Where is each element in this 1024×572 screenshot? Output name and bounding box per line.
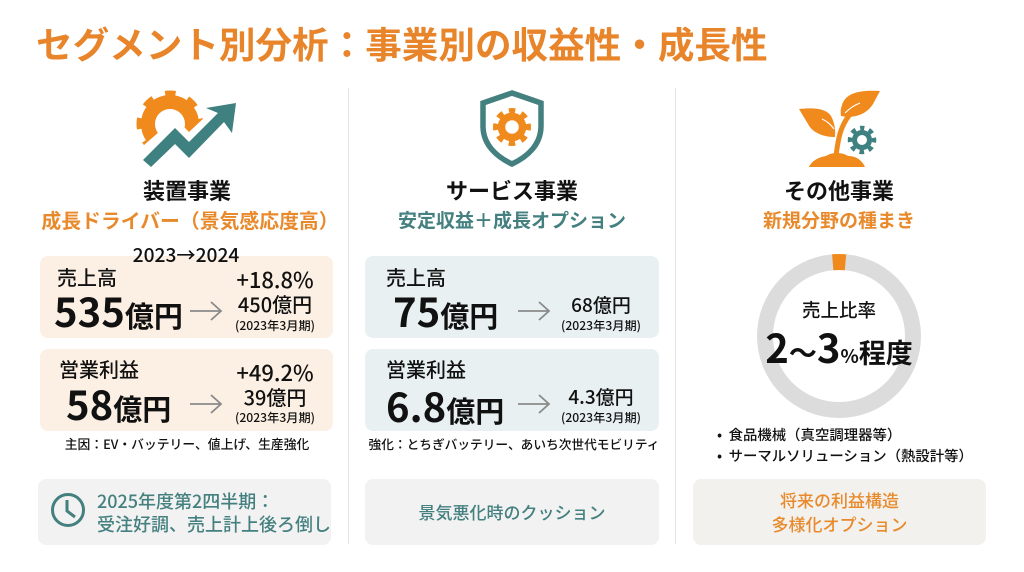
arrow <box>190 302 222 320</box>
callout: cushion <box>365 479 659 545</box>
callout text: 受注好調、売上計上後ろ倒し <box>97 511 331 537</box>
heading: その他事業: その他事業 <box>784 174 894 206</box>
title: セグメント別分析：事業別の収益性・成長性 <box>36 16 768 69</box>
prior value: 4.3億円: 4.3億円 <box>568 383 634 410</box>
callout text: 多様化オプション <box>772 511 908 536</box>
panel: 装置事業 <box>38 90 339 545</box>
donut label: 売上比率 <box>802 297 876 323</box>
value: 6.8億円: 6.8億円 <box>386 376 504 434</box>
panel: サービス事業 <box>365 90 659 545</box>
metric card: 営業利益 <box>40 349 333 431</box>
note: reinforcement: 強化：とちぎバッテリー、あいち次世代モビリティ <box>369 434 659 453</box>
label: 売上高: 売上高 <box>57 262 117 291</box>
label: 営業利益: 営業利益 <box>386 354 466 383</box>
period note: (2023年3月期) <box>561 316 641 334</box>
metric card: 売上高 <box>40 256 333 338</box>
heading: サービス事業: サービス事業 <box>446 174 578 206</box>
prior value: 450億円: 450億円 <box>238 289 312 318</box>
icon: gear and rising arrow <box>136 90 236 167</box>
callout text: 将来の利益構造 <box>780 487 899 512</box>
donut chart: sales ratio <box>757 254 921 418</box>
callout: order status <box>38 479 331 545</box>
icon: sprout with gear <box>799 90 880 167</box>
icon: shield with gear <box>480 90 544 167</box>
prior value: 39億円: 39億円 <box>244 382 306 411</box>
prior value: 68億円: 68億円 <box>571 291 631 318</box>
comparison years label: 2023→2024 <box>133 240 239 268</box>
subheading: 成長ドライバー（景気感応度高） <box>41 205 339 234</box>
bullet list: • サーマルソリューション（熱設計等） <box>717 445 973 466</box>
bullet list: • 食品機械（真空調理器等） <box>717 424 901 445</box>
subheading: 新規分野の種まき <box>763 206 915 233</box>
panel: その他事業 <box>693 90 986 545</box>
period note: (2023年3月期) <box>235 316 315 334</box>
growth: +18.8%: +18.8% <box>236 263 314 295</box>
value: 535億円: 535億円 <box>54 281 183 339</box>
callout text: 景気悪化時のクッション <box>418 499 606 524</box>
subheading: 安定収益＋成長オプション <box>398 206 626 233</box>
growth: +49.2%: +49.2% <box>236 356 314 388</box>
metric card: 売上高 <box>365 256 659 338</box>
arrow <box>190 394 222 414</box>
callout text: 2025年度第2四半期： <box>97 488 274 514</box>
note: main factors: 主因：EV・バッテリー、値上げ、生産強化 <box>65 434 309 453</box>
heading: 装置事業: 装置事業 <box>143 174 231 206</box>
donut value: 2～3%程度 <box>765 317 913 375</box>
period note: (2023年3月期) <box>561 408 641 426</box>
callout text <box>97 488 331 537</box>
period note: (2023年3月期) <box>235 408 315 426</box>
value: 75億円: 75億円 <box>393 281 498 339</box>
icon: clock <box>51 493 85 527</box>
value: 58億円: 58億円 <box>66 374 171 432</box>
arrow <box>518 302 550 320</box>
label: 売上高: 売上高 <box>386 262 446 291</box>
bullet list <box>717 424 973 466</box>
callout: future <box>693 479 986 545</box>
arrow <box>518 394 550 414</box>
metric card: 営業利益 <box>365 349 659 431</box>
callout text <box>772 487 908 536</box>
label: 営業利益: 営業利益 <box>59 354 139 383</box>
